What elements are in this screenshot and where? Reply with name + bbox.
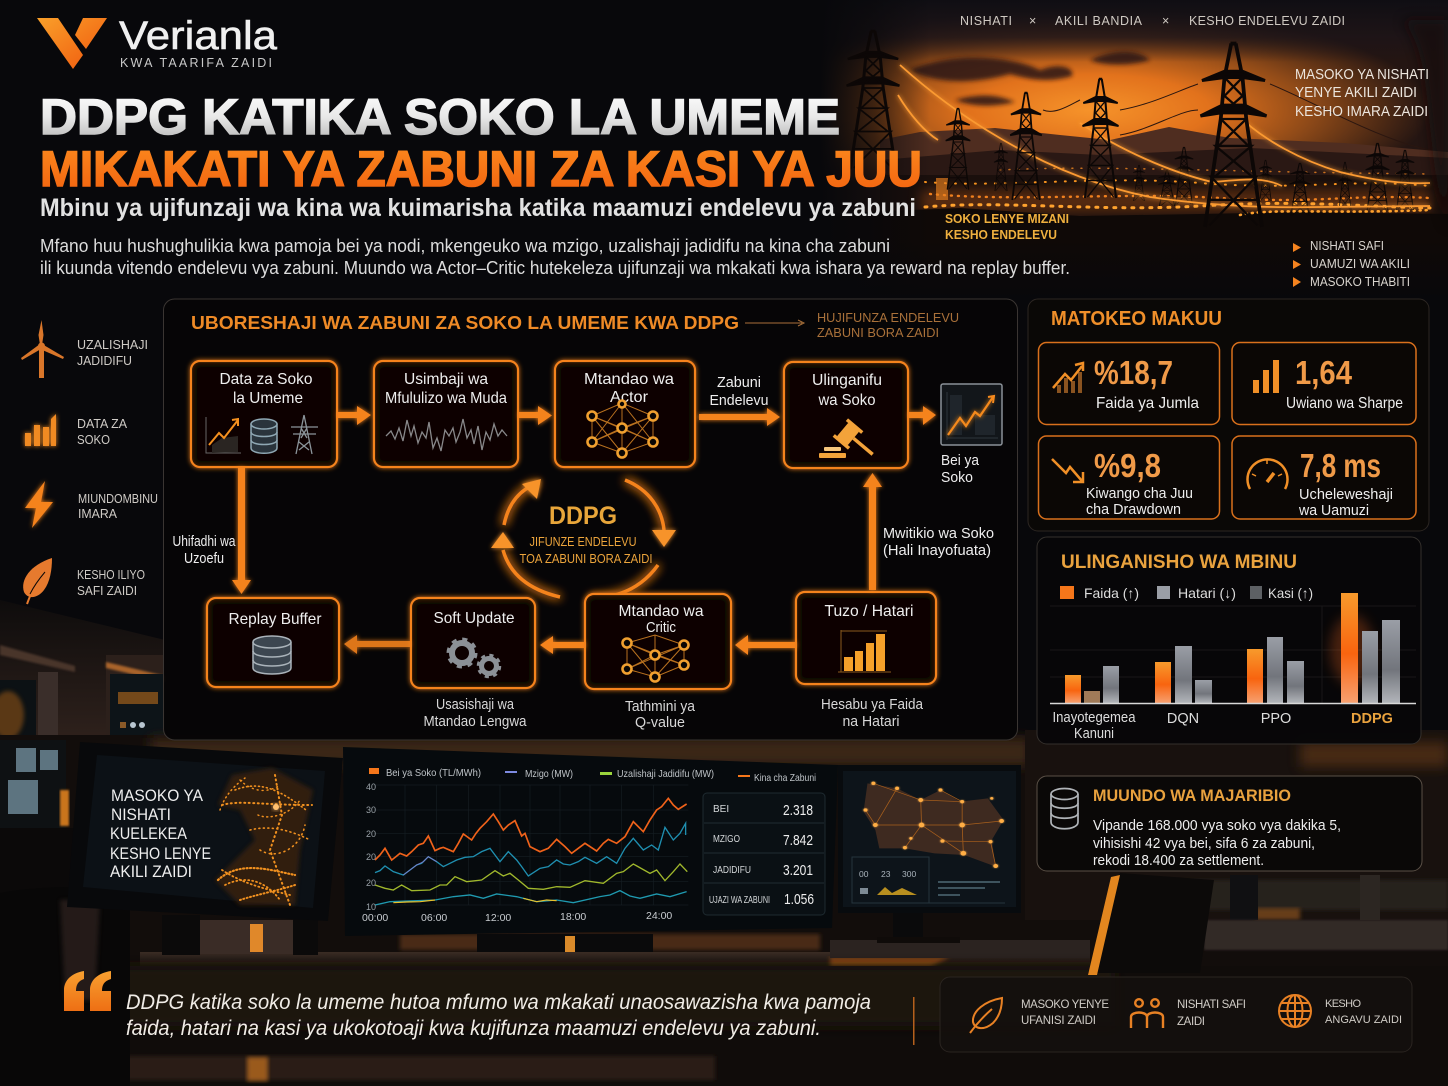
- icon: leaf outline: [970, 998, 1002, 1033]
- node: actor network: Actor: [610, 389, 649, 406]
- caption: bid output: Endelevu: [710, 393, 768, 409]
- metric: decision latency: [1232, 436, 1416, 519]
- benefit label: [1177, 999, 1246, 1028]
- hero slogan: MASOKO YA NISHATI: [1295, 67, 1429, 83]
- icon: leaf: [23, 558, 52, 604]
- node: critic network: [585, 594, 731, 689]
- grid network: [864, 782, 1004, 868]
- caption: market price: [941, 453, 980, 486]
- icon: growth: [1053, 363, 1083, 393]
- monitor caption: [110, 786, 211, 881]
- node: critic network: Mtandao wa: [618, 603, 704, 620]
- chart card: market price: [941, 384, 1002, 445]
- intro text: Mfano huu hushughulikia kwa pamoja bei ya nodi, mkengeuko wa mzigo, uzalishaji jadidifu na kina cha zabuni: [40, 236, 890, 256]
- quote mark icon: [64, 971, 111, 1011]
- hero bullet list: UAMUZI WA AKILI: [1310, 257, 1410, 271]
- heading: method comparison: ULINGANISHO WA MBINU: [1061, 552, 1297, 573]
- node: time series embedding: Usimbaji wa: [404, 371, 488, 388]
- subtitle: Mbinu ya ujifunzaji wa kina wa kuimarisha katika maamuzi endelevu ya zabuni: [40, 194, 916, 222]
- loop subtitle: TOA ZABUNI BORA ZAIDI: [520, 552, 652, 566]
- icon: gears: [448, 640, 500, 676]
- background: control room wall and desk: [0, 600, 1448, 1086]
- loop title: DDPG: [549, 502, 617, 530]
- sidebar label: UZALISHAJI: [77, 338, 148, 352]
- axis values: 20: [366, 852, 376, 862]
- axis values: 40: [366, 782, 376, 792]
- hero slogan: YENYE AKILI ZAIDI: [1295, 85, 1417, 101]
- arrow: heading pointer: [745, 320, 804, 326]
- axis values: [366, 782, 376, 912]
- time axis: 12:00: [485, 912, 511, 924]
- map lights: [215, 768, 313, 905]
- stats table: 7.842: [783, 832, 813, 849]
- left sidebar: themes: SAFI ZAIDI: [77, 584, 137, 598]
- node: time series embedding: Mfululizo wa Muda: [385, 390, 507, 407]
- back monitors: [0, 740, 66, 828]
- node: market data: la Umeme: [233, 390, 303, 407]
- sidebar label: KESHO ILIYO: [77, 568, 145, 582]
- hero slogan: [1295, 67, 1429, 120]
- gold tagline: [945, 212, 1069, 242]
- chart labels: PPO: [1261, 711, 1291, 727]
- stats table: MZIGO: [713, 834, 740, 845]
- gold tagline: SOKO LENYE MIZANI: [945, 212, 1069, 226]
- icon: waveform: [386, 419, 507, 451]
- gold tagline: KESHO ENDELEVU: [945, 228, 1057, 242]
- arrow: data to embedding: [338, 406, 371, 425]
- left sidebar: themes: IMARA: [78, 507, 118, 521]
- setup description: Vipande 168.000 vya soko vya dakika 5,: [1093, 818, 1341, 834]
- caption: market response: Mwitikio wa Soko: [883, 526, 994, 542]
- bar chart: [1050, 593, 1416, 704]
- hero bullet list: [1293, 239, 1410, 289]
- node: market data: Data za Soko: [220, 371, 313, 388]
- dashboard readouts: 300: [902, 869, 916, 879]
- hero bullet list: MASOKO THABITI: [1310, 275, 1410, 289]
- arrow: reward to clearing: [863, 473, 882, 590]
- heading note: ZABUNI BORA ZAIDI: [817, 326, 939, 340]
- time axis: 24:00: [646, 910, 672, 922]
- caption: market price: Soko: [941, 470, 973, 486]
- node: critic network: Critic: [646, 619, 676, 636]
- line chart: [373, 785, 688, 905]
- icon: bars: [1253, 360, 1279, 393]
- metric: Sharpe ratio: Uwiano wa Sharpe: [1286, 395, 1403, 412]
- node: market clearing: [784, 362, 908, 468]
- arrow: critic to soft update: [540, 636, 585, 654]
- hero bullet list: NISHATI SAFI: [1310, 239, 1384, 253]
- chart legend: Hatari (↓): [1178, 585, 1236, 601]
- arrow: actor to clearing: [699, 408, 780, 426]
- icon: V logo mark: [37, 18, 107, 69]
- icon: wind turbine: [21, 320, 64, 378]
- dashboard readouts: [859, 869, 916, 879]
- node: reward and risk: [796, 592, 936, 684]
- chart legend: Kasi (↑): [1268, 585, 1313, 601]
- heading: flow diagram: UBORESHAJI WA ZABUNI ZA SOKO LA UMEME KWA DDPG: [191, 312, 739, 333]
- time axis: 00:00: [362, 912, 388, 924]
- axis values: 30: [366, 805, 376, 815]
- axis values: 20: [366, 878, 376, 888]
- title: [40, 89, 922, 197]
- caption: target network update: [424, 697, 527, 730]
- benefit label: KESHO: [1325, 998, 1361, 1010]
- chart legend: Uzalishaji Jadidifu (MW): [617, 768, 714, 780]
- arrow: clearing to price: [909, 406, 936, 425]
- chart labels: Kanuni: [1074, 726, 1114, 742]
- axis values: 10: [366, 902, 376, 912]
- chart legend: Mzigo (MW): [525, 768, 573, 780]
- panel: key results: [1028, 299, 1429, 531]
- icon: gavel: [819, 418, 880, 464]
- heading: key results: MATOKEO MAKUU: [1051, 308, 1222, 330]
- icon: bar chart: [25, 414, 56, 446]
- caption: target network update: Usasishaji wa: [436, 697, 515, 713]
- panel: DDPG bidding flow diagram: [164, 299, 1018, 740]
- axis values: 20: [366, 829, 376, 839]
- node: reward and risk: Tuzo / Hatari: [824, 603, 914, 620]
- dim cables: [1043, 84, 1430, 150]
- quote divider: [913, 997, 914, 1045]
- stats table: [703, 793, 825, 915]
- caption: profit and risk calculation: na Hatari: [842, 714, 900, 730]
- time axis: [362, 910, 672, 924]
- desk surfaces: [1204, 920, 1448, 950]
- chart labels: [1052, 710, 1393, 742]
- left sidebar: themes: SOKO: [77, 433, 110, 447]
- benefit label: UFANISI ZAIDI: [1021, 1015, 1096, 1027]
- intro text: [40, 236, 1070, 278]
- caption: market response: (Hali Inayofuata): [883, 543, 991, 559]
- icon: neural network: [588, 400, 658, 458]
- caption: experience storage: Uzoefu: [184, 551, 224, 567]
- icon: pylon: [291, 415, 318, 454]
- front chairs: [0, 887, 130, 1086]
- icon: price chart: [206, 417, 241, 453]
- glowing wires: [898, 65, 1430, 207]
- icon: database: [251, 419, 277, 453]
- monitor caption: KESHO LENYE: [110, 844, 211, 863]
- monitor caption: NISHATI: [111, 805, 171, 824]
- setup description: [1093, 818, 1341, 869]
- top navigation tags: KESHO ENDELEVU ZAIDI: [1189, 14, 1345, 28]
- icon: globe: [1279, 995, 1311, 1027]
- monitor: live market chart: [343, 747, 838, 952]
- node: actor network: [555, 361, 695, 467]
- icon: rising bars: [838, 630, 891, 672]
- metric: total profit: [1038, 342, 1220, 424]
- node: market clearing: wa Soko: [818, 392, 876, 409]
- metric: maximum drawdown: [1038, 436, 1220, 519]
- metric: total profit: %18,7: [1094, 354, 1173, 391]
- icon: neural network: [622, 635, 688, 682]
- sidebar label: MIUNDOMBINU: [78, 492, 158, 506]
- caption: profit and risk calculation: Hesabu ya Faida: [821, 697, 924, 713]
- caption: Q-value evaluation: Tathmini ya: [625, 699, 696, 715]
- benefit label: NISHATI SAFI: [1177, 999, 1246, 1011]
- chart labels: DDPG: [1351, 711, 1393, 727]
- icon: lightning bolt: [25, 481, 53, 528]
- setup description: rekodi 18.400 za settlement.: [1093, 853, 1264, 869]
- icon: database: [1051, 788, 1078, 829]
- left sidebar: themes: [21, 320, 158, 604]
- intro text: ili kuunda vitendo endelevu vya zabuni. Muundo wa Actor–Critic hutekeleza ujifunzaji wa mkakati kwa ishara ya reward na replay buffer.: [40, 258, 1070, 278]
- icon: decline: [1052, 459, 1083, 482]
- logo: [37, 14, 278, 70]
- node: replay buffer: Replay Buffer: [228, 611, 322, 628]
- dashboard readouts: 00: [859, 869, 869, 879]
- loop subtitle: [520, 535, 652, 566]
- node: soft update: [411, 598, 535, 688]
- monitor caption: KUELEKEA: [110, 824, 188, 843]
- monitor: energy map: [67, 742, 343, 955]
- caption: bid output: [710, 375, 768, 409]
- metric: decision latency: Ucheleweshaji: [1299, 486, 1393, 503]
- hero slogan: KESHO IMARA ZAIDI: [1295, 104, 1428, 120]
- monitor caption: MASOKO YA: [111, 786, 204, 805]
- time axis: 18:00: [560, 911, 586, 923]
- arrow: embedding to actor: [519, 406, 552, 425]
- closing quote: faida, hatari na kasi ya ukokotoaji kwa kujifunza maamuzi endelevu ya zabuni.: [126, 1017, 821, 1040]
- benefit label: [1021, 999, 1109, 1027]
- dashboard readouts: 23: [881, 869, 891, 879]
- setup description: vihisishi 42 vya bei, sifa 6 za zabuni,: [1093, 836, 1315, 852]
- caption: Q-value evaluation: [625, 699, 696, 731]
- chart labels: DQN: [1167, 711, 1199, 727]
- metric: maximum drawdown: %9,8: [1094, 447, 1161, 484]
- arrow: data to replay buffer: [232, 468, 251, 594]
- mountains: [880, 127, 1448, 300]
- caption: experience storage: Uhifadhi wa: [172, 534, 236, 550]
- title: DDPG KATIKA SOKO LA UMEME: [40, 89, 840, 145]
- caption: experience storage: [172, 534, 236, 567]
- top navigation tags: [960, 14, 1345, 28]
- stats table: 2.318: [783, 802, 813, 819]
- caption: bid output: Zabuni: [717, 375, 761, 391]
- loop arrowheads: [491, 479, 676, 548]
- chart labels: Inayotegemea: [1052, 710, 1136, 726]
- top navigation tags: ×: [1029, 14, 1036, 28]
- node: market clearing: Ulinganifu: [812, 372, 882, 389]
- node: actor network: Mtandao wa: [584, 371, 674, 388]
- sidebar label: DATA ZA: [77, 417, 128, 431]
- node: time series embedding: [374, 361, 518, 467]
- arrow: reward to critic: [735, 635, 796, 655]
- logo wordmark: Verianla: [119, 14, 278, 58]
- benefit label: ZAIDI: [1177, 1016, 1205, 1028]
- chart legend: [369, 767, 816, 784]
- stats table: JADIDIFU: [713, 865, 751, 876]
- metric: Sharpe ratio: 1,64: [1295, 354, 1353, 391]
- large towers: [847, 31, 899, 169]
- caption: market response: [883, 526, 994, 559]
- top navigation tags: AKILI BANDIA: [1055, 14, 1143, 28]
- top navigation tags: NISHATI: [960, 14, 1012, 28]
- metric: total profit: Faida ya Jumla: [1096, 395, 1199, 412]
- left sidebar: themes: JADIDIFU: [77, 354, 132, 368]
- chart legend: Faida (↑): [1084, 585, 1139, 601]
- caption: target network update: Mtandao Lengwa: [424, 714, 527, 730]
- small far towers: [994, 143, 1415, 216]
- heading note: [817, 311, 959, 340]
- monitor: grid map: [838, 765, 1021, 943]
- heading note: HUJIFUNZA ENDELEVU: [817, 311, 959, 325]
- icon: database: [253, 636, 291, 674]
- DDPG learning loop: [491, 479, 676, 598]
- logo tagline: KWA TAARIFA ZAIDI: [120, 56, 272, 70]
- caption: market price: Bei ya: [941, 453, 980, 469]
- metric: decision latency: 7,8 ms: [1300, 447, 1381, 484]
- node: soft update: Soft Update: [434, 610, 515, 627]
- chart legend: Bei ya Soko (TL/MWh): [386, 767, 481, 779]
- caption: profit and risk calculation: [821, 697, 924, 730]
- stats table: BEI: [713, 804, 729, 815]
- arrow: soft update to replay buffer: [344, 635, 410, 654]
- top navigation tags: ×: [1162, 14, 1169, 28]
- chart legend: [1060, 585, 1313, 601]
- time axis: 06:00: [421, 912, 447, 924]
- title: MIKAKATI YA ZABUNI ZA KASI YA JUU: [40, 141, 922, 197]
- metric: decision latency: wa Uamuzi: [1298, 502, 1369, 519]
- metric: maximum drawdown: Kiwango cha Juu: [1086, 485, 1193, 502]
- panel: experiment setup: [1037, 776, 1422, 871]
- city lights: [925, 168, 1430, 215]
- panel: method comparison: [1037, 537, 1421, 744]
- loop subtitle: JIFUNZE ENDELEVU: [530, 535, 636, 549]
- node: replay buffer: [207, 598, 339, 687]
- stats table: 3.201: [783, 862, 813, 879]
- benefit label: ANGAVU ZAIDI: [1325, 1014, 1402, 1026]
- node: market data: [191, 361, 337, 467]
- benefit label: [1325, 998, 1402, 1026]
- monitor caption: AKILI ZAIDI: [110, 862, 192, 881]
- stats table: UJAZI WA ZABUNI: [709, 895, 770, 906]
- stats table: 1.056: [784, 891, 814, 908]
- chart legend: Kina cha Zabuni: [754, 772, 816, 784]
- icon: people group: [1131, 999, 1163, 1028]
- icon: gauge: [1248, 459, 1288, 489]
- heading: experiment setup: MUUNDO WA MAJARIBIO: [1093, 787, 1291, 805]
- metric: maximum drawdown: cha Drawdown: [1086, 501, 1181, 518]
- benefit label: MASOKO YENYE: [1021, 999, 1109, 1011]
- metric: Sharpe ratio: [1232, 342, 1416, 424]
- closing quote: DDPG katika soko la umeme hutoa mfumo wa mkakati unaosawazisha kwa pamoja: [126, 991, 871, 1014]
- closing quote: [126, 991, 871, 1040]
- caption: Q-value evaluation: Q-value: [635, 715, 685, 731]
- panel: future benefits: [940, 977, 1412, 1052]
- background: sunset sky with transmission towers: [820, 0, 1448, 300]
- loop arcs: [503, 480, 664, 598]
